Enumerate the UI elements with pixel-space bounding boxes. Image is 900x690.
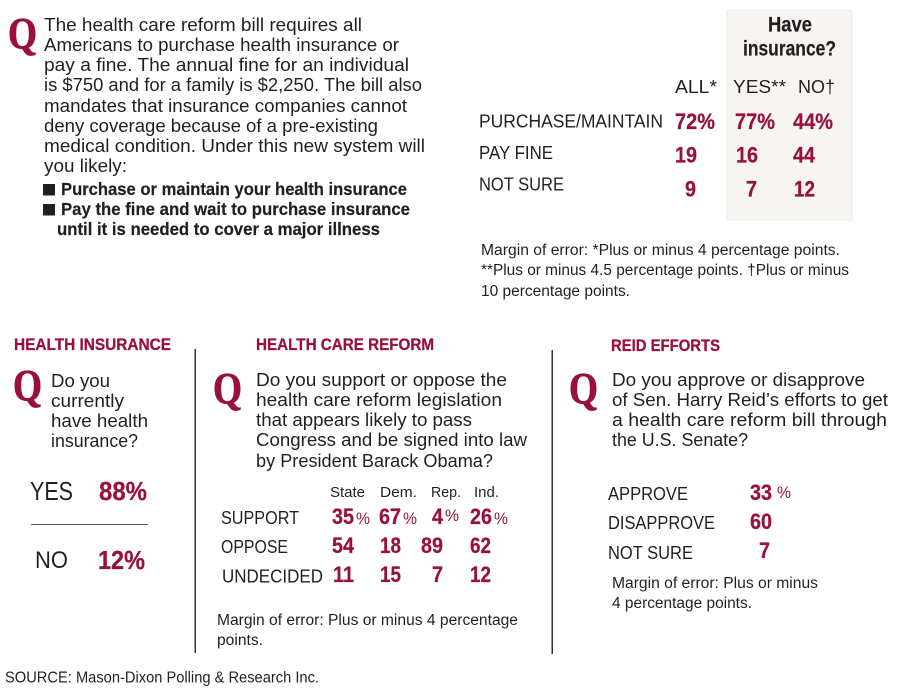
margin of error note bbox=[612, 575, 818, 612]
row: oppose: 89 bbox=[421, 533, 443, 558]
main question text: pay a fine. The annual fine for an individual bbox=[44, 54, 409, 75]
row: not sure: NOT SURE bbox=[479, 174, 564, 194]
row: support: 26 bbox=[470, 504, 492, 529]
row: oppose: 54 bbox=[332, 533, 355, 558]
margin of error note: 10 percentage points. bbox=[481, 283, 630, 300]
main question text: The health care reform bill requires all bbox=[44, 14, 362, 35]
row: support: 35 bbox=[332, 504, 354, 529]
row: not sure: 7 bbox=[746, 176, 757, 202]
question text: Do you approve or disapprove bbox=[612, 369, 865, 390]
row: support: % bbox=[445, 506, 459, 525]
shaded column panel bbox=[727, 10, 852, 220]
row: pay fine bbox=[479, 142, 816, 168]
answer options: until it is needed to cover a major illness bbox=[57, 219, 380, 239]
result: yes: YES bbox=[30, 478, 73, 506]
question text: of Sen. Harry Reid’s efforts to get bbox=[612, 389, 888, 410]
main question text: mandates that insurance companies cannot bbox=[44, 95, 407, 116]
question text: Congress and be signed into law bbox=[256, 429, 528, 450]
row: not sure: 7 bbox=[759, 538, 770, 563]
row: pay fine: PAY FINE bbox=[479, 142, 553, 163]
row: purchase/maintain: PURCHASE/MAINTAIN bbox=[479, 110, 663, 132]
column labels bbox=[675, 76, 835, 97]
source note: SOURCE: Mason-Dixon Polling & Research Inc. bbox=[5, 670, 319, 686]
column labels: ALL* bbox=[675, 76, 717, 97]
margin of error note: Margin of error: Plus or minus 4 percentage bbox=[217, 612, 518, 629]
column heading: have insurance: insurance? bbox=[743, 38, 836, 60]
row: oppose: 18 bbox=[380, 533, 401, 558]
margin of error note: Margin of error: *Plus or minus 4 percentage points. bbox=[481, 242, 840, 259]
main question text: deny coverage because of a pre-existing bbox=[44, 115, 378, 136]
row: undecided: UNDECIDED bbox=[222, 566, 323, 586]
heading: HEALTH INSURANCE bbox=[14, 335, 171, 354]
margin of error note: points. bbox=[217, 632, 263, 649]
row: pay fine: 44 bbox=[793, 142, 816, 168]
row: oppose: 62 bbox=[470, 533, 491, 558]
row: undecided: 12 bbox=[470, 562, 491, 587]
main question text: you likely: bbox=[44, 155, 127, 176]
panel: main question bbox=[8, 9, 425, 239]
main question text: medical condition. Under this new system will bbox=[44, 135, 425, 156]
row: undecided: 15 bbox=[380, 562, 401, 587]
icon: Q mark: Q bbox=[13, 361, 42, 410]
row: oppose bbox=[221, 533, 491, 558]
row: support: 67 bbox=[379, 504, 401, 529]
row: not sure bbox=[479, 174, 815, 202]
margin of error note: **Plus or minus 4.5 percentage points. †Plus or minus bbox=[481, 262, 849, 279]
question text: health care reform legislation bbox=[256, 389, 502, 410]
row: support bbox=[221, 504, 508, 529]
result: no bbox=[35, 545, 145, 575]
row: not sure: 12 bbox=[794, 176, 815, 202]
row: approve: APPROVE bbox=[608, 483, 688, 504]
row: disapprove: 60 bbox=[750, 509, 772, 534]
row: disapprove: DISAPPROVE bbox=[608, 512, 715, 533]
column labels: Dem. bbox=[380, 485, 417, 501]
question text bbox=[256, 369, 528, 471]
question text: the U.S. Senate? bbox=[612, 429, 748, 450]
column heading: have insurance: Have bbox=[768, 14, 812, 36]
row: purchase/maintain bbox=[479, 109, 833, 134]
question text: that appears likely to pass bbox=[256, 409, 472, 430]
question text: Do you bbox=[51, 370, 110, 391]
column labels: State bbox=[330, 485, 365, 501]
heading: REID EFFORTS bbox=[611, 336, 720, 355]
row: not sure bbox=[608, 538, 770, 563]
row: support: % bbox=[403, 509, 417, 528]
result: no: 12% bbox=[98, 545, 145, 575]
question text: Do you support or oppose the bbox=[256, 369, 507, 390]
answer options bbox=[43, 179, 410, 239]
question text: by President Barack Obama? bbox=[256, 450, 493, 471]
row: undecided: 7 bbox=[432, 562, 443, 587]
column labels: NO† bbox=[798, 76, 835, 97]
row: purchase/maintain: 72% bbox=[675, 109, 715, 134]
result: yes bbox=[30, 476, 147, 506]
answer options: Purchase or maintain your health insurance bbox=[61, 179, 407, 199]
margin of error note bbox=[481, 242, 849, 300]
question text bbox=[51, 370, 148, 451]
row: approve bbox=[608, 480, 791, 505]
question text: have health bbox=[51, 410, 148, 431]
icon: Q mark: Q bbox=[213, 364, 242, 413]
main question text: Americans to purchase health insurance or bbox=[44, 34, 399, 55]
row: support: SUPPORT bbox=[221, 507, 299, 528]
row: support: % bbox=[494, 509, 508, 528]
column labels bbox=[330, 485, 499, 501]
row: support: 4 bbox=[432, 504, 444, 529]
row: support: % bbox=[356, 509, 370, 528]
row: not sure: 9 bbox=[685, 176, 696, 202]
icon: Q mark: Q bbox=[8, 9, 37, 58]
row: not sure: NOT SURE bbox=[608, 542, 693, 563]
row: purchase/maintain: 77% bbox=[735, 109, 775, 134]
panel: health insurance bbox=[13, 335, 171, 575]
question text bbox=[612, 369, 888, 450]
row: oppose: OPPOSE bbox=[221, 536, 288, 557]
row: pay fine: 16 bbox=[736, 142, 758, 168]
main question text bbox=[44, 14, 425, 176]
result: yes: 88% bbox=[99, 476, 147, 506]
panel: results table by insurance status bbox=[479, 10, 852, 300]
margin of error note: 4 percentage points. bbox=[612, 595, 752, 612]
column labels: Rep. bbox=[431, 485, 461, 501]
column heading: have insurance bbox=[743, 14, 836, 60]
panel: Reid efforts bbox=[569, 336, 888, 612]
answer options: Pay the fine and wait to purchase insurance bbox=[61, 199, 410, 219]
question text: a health care reform bill through bbox=[612, 409, 887, 430]
row: undecided: 11 bbox=[333, 562, 354, 587]
result: no: NO bbox=[35, 547, 68, 574]
column labels: YES** bbox=[733, 76, 786, 97]
row: approve: % bbox=[777, 483, 791, 502]
margin of error note: Margin of error: Plus or minus bbox=[612, 575, 818, 592]
main question text: is $750 and for a family is $2,250. The bill also bbox=[44, 74, 422, 95]
row: disapprove bbox=[608, 509, 772, 534]
row: approve: 33 bbox=[750, 480, 772, 505]
margin of error note bbox=[217, 612, 518, 649]
heading: HEALTH CARE REFORM bbox=[256, 335, 434, 354]
question text: currently bbox=[51, 390, 125, 411]
row: purchase/maintain: 44% bbox=[793, 109, 833, 134]
question text: insurance? bbox=[51, 430, 138, 451]
column labels: Ind. bbox=[474, 485, 499, 501]
row: undecided bbox=[222, 562, 491, 587]
icon: Q mark: Q bbox=[569, 364, 598, 413]
row: pay fine: 19 bbox=[675, 142, 697, 168]
panel: health care reform bbox=[213, 335, 528, 649]
